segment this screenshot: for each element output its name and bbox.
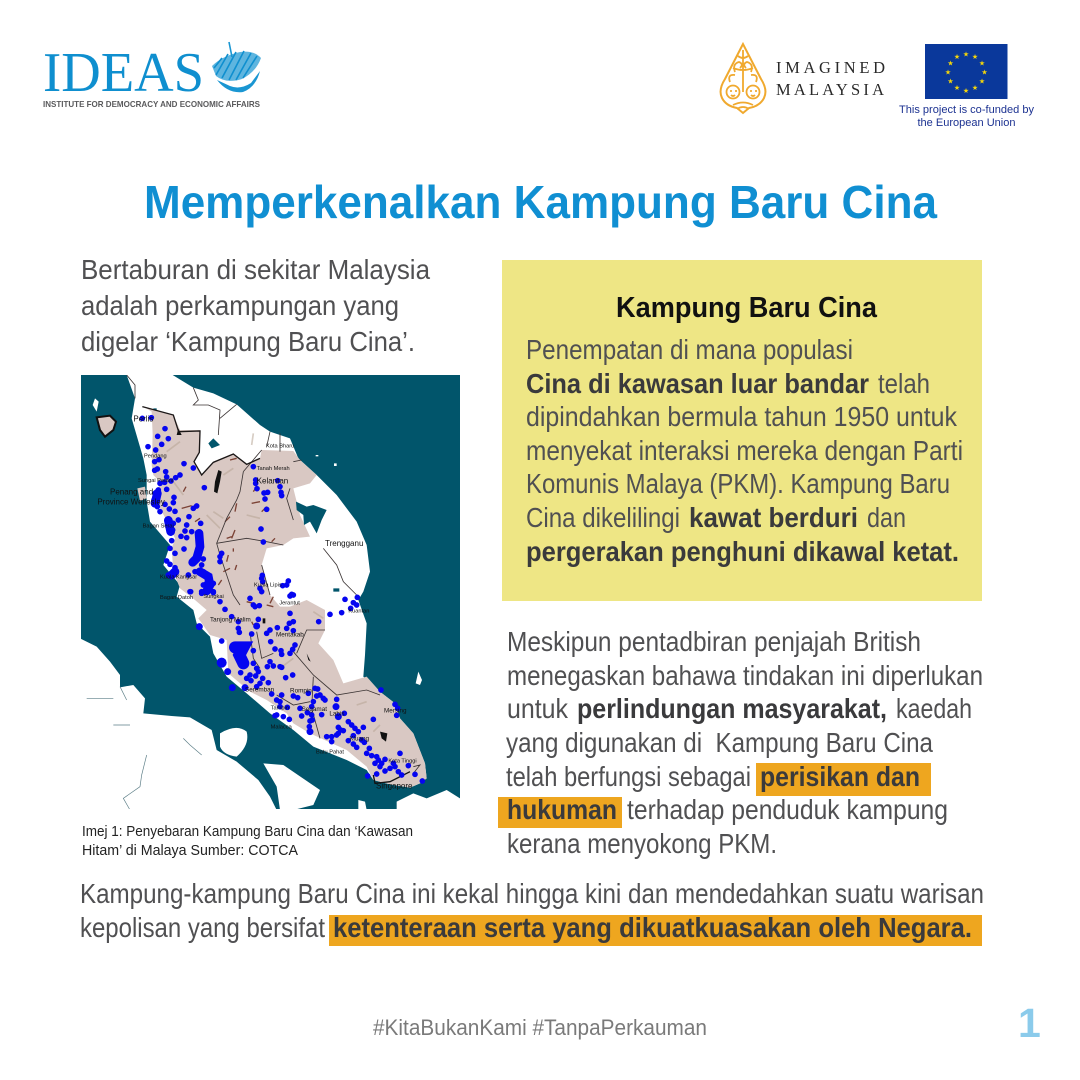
panel heading: Kampung Baru Cina (616, 292, 878, 324)
blue dots: dense Perak cluster (155, 493, 210, 591)
text block: legacy conclusion: ketenteraan serta yang dikuatkuasakan oleh Negara. (333, 912, 972, 943)
highlight: ketenteraan (329, 915, 982, 946)
map place labels: Batu Pahat (316, 749, 344, 755)
icon: EU stars: ★ (972, 84, 978, 92)
land: hill texture (167, 433, 380, 732)
map place labels: Trengganu (325, 539, 363, 548)
page number: 1 (1018, 1000, 1041, 1046)
logo: IDEAS: IDEAS (43, 42, 204, 104)
panel text (526, 334, 963, 567)
map place labels: Rompin (290, 688, 312, 695)
logo: IDEAS (43, 42, 261, 109)
text block: British administration: untuk (507, 693, 569, 724)
map place labels: Seremban (245, 686, 275, 693)
caption: map source: Hitam’ di Malaya Sumber: COTCA (82, 843, 298, 859)
icon: EU stars: ★ (947, 78, 954, 86)
icon: gunungan (721, 44, 765, 113)
text block: legacy conclusion: kepolisan yang bersifat (80, 912, 325, 943)
icon: EU stars: ★ (972, 53, 978, 61)
logo: Imagined Malaysia: MALAYSIA (776, 80, 884, 99)
water bodies (153, 408, 339, 592)
map place labels: Perlis (133, 415, 153, 424)
highlight: perisikan dan (756, 763, 931, 796)
lakes (177, 428, 387, 742)
icon: EU stars: ★ (945, 68, 951, 76)
text block: British administration: telah berfungsi sebagai (506, 761, 751, 792)
panel text: Cina di kawasan luar bandar (526, 368, 869, 399)
map place labels: Singapore (376, 782, 413, 791)
text block: British administration: terhadap penduduk kampung (627, 794, 948, 825)
logo: Imagined Malaysia (721, 44, 885, 113)
icon: EU stars: ★ (954, 53, 960, 61)
title: Memperkenalkan Kampung Baru Cina (144, 176, 937, 228)
map place labels: Mentakab (276, 632, 304, 639)
blue dots: southern states (191, 592, 422, 781)
map place labels: Kluang (349, 736, 370, 743)
map place labels: Tanah Merah (257, 466, 290, 472)
text block: introduction: digelar ‘Kampung Baru Cina’. (81, 326, 415, 357)
icon: EU stars: ★ (963, 50, 969, 58)
panel text: Penempatan di mana populasi (526, 334, 853, 365)
logo: IDEAS: INSTITUTE FOR DEMOCRACY AND ECONOMIC AFFAIRS (43, 100, 261, 109)
map place labels: Province Wellesley (97, 498, 165, 507)
logo: EU flag and co-funding note (899, 44, 1034, 129)
map place labels: Tanjong Malim (210, 617, 251, 624)
text block: British administration: perlindungan masyarakat, (577, 693, 887, 724)
caption: map source (82, 824, 413, 859)
panel: Kampung Baru Cina definition (502, 260, 982, 601)
text block: British administration: perisikan dan (760, 761, 920, 792)
map place labels: Kota Bharu (266, 444, 294, 450)
text block: introduction: adalah perkampungan yang (81, 290, 399, 321)
logo: EU flag and co-funding note: the European Union (918, 117, 1016, 129)
map place labels: Kota Tinggi (388, 758, 417, 764)
text block: introduction (81, 254, 430, 357)
icon: EU stars (945, 50, 988, 95)
map place labels: Jerantut (279, 600, 300, 606)
panel text: dipindahkan bermula tahun 1950 untuk (526, 401, 958, 432)
text block: legacy conclusion (80, 878, 984, 946)
icon: EU stars: ★ (979, 60, 985, 68)
panel text: telah (878, 368, 930, 399)
map place labels: Pendang (144, 453, 167, 459)
map place labels: Mersing (384, 707, 407, 714)
icon: EU stars: ★ (981, 68, 988, 76)
map place labels: Labis (329, 710, 344, 717)
icon: EU stars: ★ (979, 78, 985, 86)
text block: British administration: menegaskan bahawa tindakan ini diperlukan (507, 660, 983, 691)
map place labels: Kuala Lipis (254, 582, 282, 588)
map place labels: Tampin (271, 705, 289, 711)
text block: British administration: Meskipun pentadbiran penjajah British (507, 626, 921, 657)
island: Langkawi (97, 416, 116, 437)
blue dots: northern states (142, 418, 292, 594)
panel text: pergerakan penghuni dikawal ketat. (526, 536, 959, 567)
panel text: dan (867, 502, 906, 533)
hashtags: #KitaBukanKami #TanpaPerkauman (373, 1015, 707, 1040)
text block: British administration: kerana menyokong PKM. (507, 828, 777, 859)
land: peninsula (127, 375, 427, 788)
logo: Imagined Malaysia: IMAGINED (776, 58, 885, 77)
map place labels: Bagan Datoh (160, 595, 193, 601)
panel text: menyekat interaksi mereka dengan Parti (526, 435, 963, 466)
land: hill shading (182, 458, 275, 625)
text block: British administration: hukuman (507, 794, 617, 825)
land: protected states shading (143, 407, 427, 788)
map place labels: Segamat (302, 706, 327, 713)
text block: British administration: yang digunakan di Kampung Baru Cina (506, 727, 933, 758)
highlight: hukuman (498, 797, 622, 828)
text block: introduction: Bertaburan di sekitar Malaysia (81, 254, 430, 285)
map place labels: Sungkai (203, 594, 224, 600)
map place labels: Malacca (271, 724, 293, 730)
panel text: Cina dikelilingi (526, 502, 680, 533)
icon: IDEAS bird (212, 42, 261, 92)
boundary lines (87, 375, 420, 810)
map place labels: Sungai Petani (138, 478, 173, 484)
panel text: kawat berduri (689, 502, 858, 533)
icon: EU stars: ★ (963, 87, 969, 95)
map: Kampung Baru Cina distribution (81, 375, 460, 809)
map place labels: Kuantan (348, 609, 369, 615)
icon: EU stars: ★ (947, 60, 954, 68)
island: Penang (137, 487, 147, 501)
land: Sumatra and islands (80, 398, 460, 810)
text block: British administration (498, 626, 983, 859)
panel text: Komunis Malaya (PKM). Kampung Baru (526, 468, 950, 499)
caption: map source: Imej 1: Penyebaran Kampung Baru Cina dan ‘Kawasan (82, 824, 413, 840)
icon: EU stars: ★ (954, 84, 960, 92)
map place labels (97, 415, 417, 791)
logo: EU flag and co-funding note: This project is co-funded by (899, 104, 1034, 116)
map place labels: Kelantan (257, 476, 288, 485)
text block: British administration: kaedah (896, 693, 972, 724)
map place labels: Bagan Serai (143, 523, 174, 529)
map place labels: Penang and (110, 488, 153, 497)
map place labels: Kuala Kangsar (160, 574, 197, 580)
